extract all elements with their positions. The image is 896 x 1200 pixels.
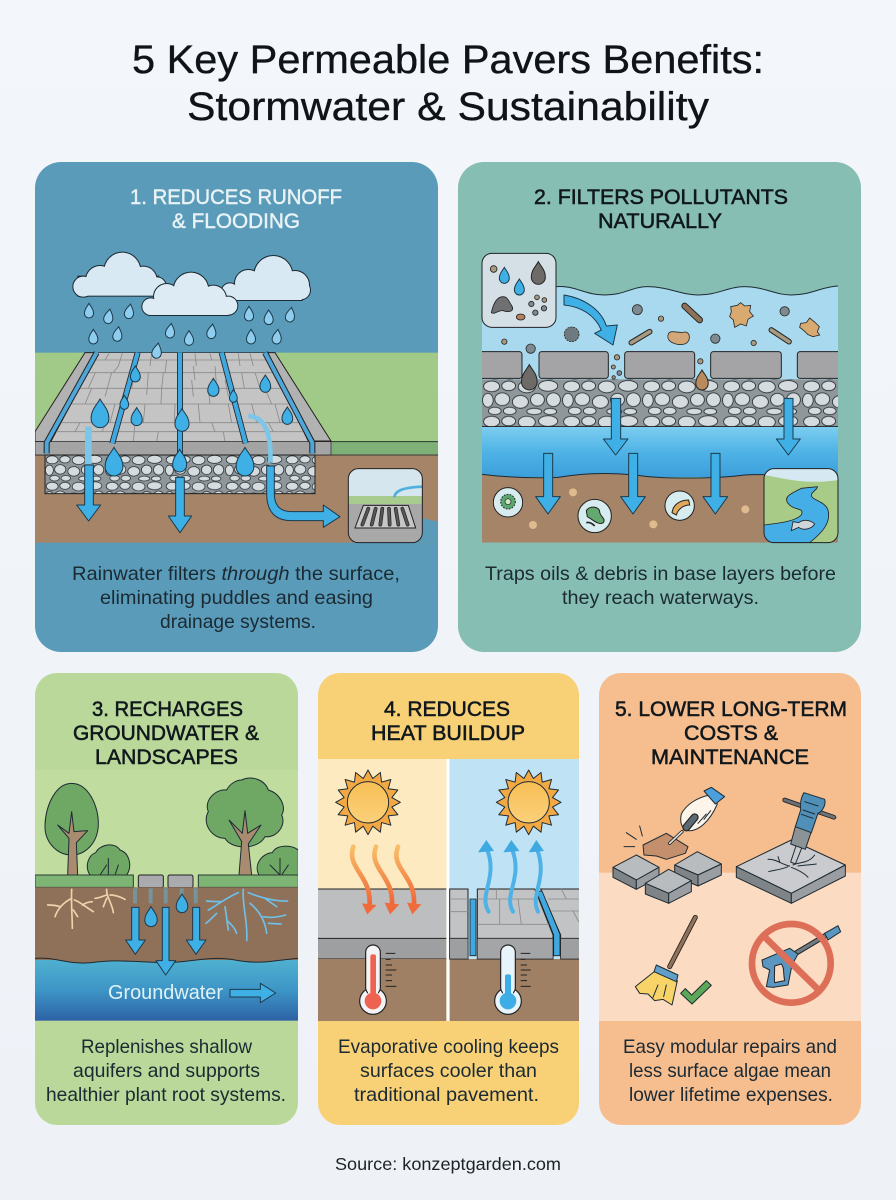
arrowheads: heat xyxy=(362,903,421,914)
label: groundwater: Groundwater xyxy=(108,981,223,1004)
bush left xyxy=(87,845,130,875)
icon: modular paver repair xyxy=(613,787,725,903)
panel: lower long-term costs and maintenance xyxy=(599,673,861,1125)
heading: recharges groundwater: LANDSCAPES xyxy=(95,745,238,769)
heading: reduces heat: HEAT BUILDUP xyxy=(371,721,525,745)
thermometer: cool xyxy=(495,945,531,1014)
title: Stormwater & Sustainability xyxy=(187,85,709,129)
body text: healthier plant root systems. xyxy=(46,1084,286,1106)
heading: lower costs: 5. LOWER LONG-TERM xyxy=(615,697,847,721)
icon: no pressure washer xyxy=(752,924,841,1003)
paver surface xyxy=(35,353,331,455)
heading: lower costs: MAINTENANCE xyxy=(651,745,809,769)
impermeable pavement xyxy=(318,889,446,1021)
ground strip and pavers xyxy=(35,875,298,888)
heading: reduces runoff: 1. REDUCES RUNOFF xyxy=(130,185,342,209)
heading: lower costs xyxy=(615,697,847,769)
heading: filters pollutants xyxy=(534,189,788,228)
panel: reduces heat buildup xyxy=(318,673,580,1125)
body text xyxy=(623,1036,837,1106)
heading: filters pollutants: NATURALLY xyxy=(598,209,722,233)
icon: jackhammer on slab xyxy=(736,793,845,903)
permeable pavement xyxy=(450,889,580,1021)
bush right xyxy=(257,846,298,875)
icon: storm drain inset xyxy=(348,469,422,543)
icon: pollutant inset xyxy=(482,253,556,327)
body text: Easy modular repairs and xyxy=(623,1036,837,1058)
body text: Evaporative cooling keeps xyxy=(338,1036,559,1058)
heading: reduces runoff xyxy=(131,189,342,228)
sun right xyxy=(496,770,561,835)
body text: drainage systems. xyxy=(160,611,316,633)
pollutant particles xyxy=(502,303,820,379)
body text xyxy=(338,1036,559,1106)
icon: microbes xyxy=(493,488,694,533)
illustration: hot vs cool pavement xyxy=(318,759,580,1021)
heading: recharges groundwater: 3. RECHARGES xyxy=(92,697,243,721)
tree left xyxy=(45,783,98,875)
source line: Source: konzeptgarden.com xyxy=(335,1154,561,1174)
sun left xyxy=(336,770,400,835)
heading: reduces heat: 4. REDUCES xyxy=(384,697,510,721)
arrows: water flow xyxy=(77,465,340,533)
body text: traditional pavement. xyxy=(354,1084,539,1106)
illustration: filtration layers xyxy=(475,253,844,543)
body text xyxy=(46,1036,286,1106)
icon: broom with check xyxy=(635,917,711,1005)
roots dry xyxy=(48,889,125,928)
body text xyxy=(485,563,836,609)
arrows: heat absorbed xyxy=(352,847,414,903)
title xyxy=(132,38,764,129)
panel: filters pollutants naturally xyxy=(458,162,861,652)
body text: surfaces cooler than xyxy=(360,1060,537,1082)
heading: recharges groundwater: GROUNDWATER & xyxy=(73,721,259,745)
heading: reduces heat xyxy=(372,701,524,740)
heading: recharges groundwater xyxy=(74,701,259,764)
body text xyxy=(72,563,400,633)
title: 5 Key Permeable Pavers Benefits: xyxy=(132,38,764,82)
arrow: groundwater flow xyxy=(230,983,276,1003)
icon: clean river inset xyxy=(764,469,838,543)
body text: Traps oils & debris in base layers before xyxy=(485,563,836,585)
gravel base xyxy=(45,455,315,494)
body text: aquifers and supports xyxy=(73,1060,260,1082)
tree right xyxy=(206,778,283,875)
pavers xyxy=(475,352,844,378)
heading: filters pollutants: 2. FILTERS POLLUTANTS xyxy=(534,185,788,209)
heading: reduces runoff: & FLOODING xyxy=(172,209,300,233)
body text: Replenishes shallow xyxy=(81,1036,253,1058)
cloud left xyxy=(73,253,166,297)
arrows: water flowing down xyxy=(536,295,800,514)
arrows: evaporating moisture xyxy=(478,840,544,912)
cloud right xyxy=(222,256,310,300)
body text: less surface algae mean xyxy=(629,1060,831,1082)
roots watered xyxy=(206,889,288,941)
thermometer: hot xyxy=(360,945,396,1014)
heading: lower costs: COSTS & xyxy=(684,721,778,745)
arrows: infiltration xyxy=(126,907,206,975)
gravel layer xyxy=(482,379,838,427)
body text: Rainwater filters through the surface, xyxy=(72,563,400,585)
body text: lower lifetime expenses. xyxy=(629,1084,833,1106)
cloud centre xyxy=(142,273,237,315)
panel: reduces runoff and flooding xyxy=(35,162,438,652)
body text: eliminating puddles and easing xyxy=(100,587,373,609)
body text: they reach waterways. xyxy=(562,587,759,609)
panel: recharges groundwater and landscapes xyxy=(35,673,298,1125)
illustration: maintenance icons xyxy=(599,787,861,1021)
illustration: trees, soil and aquifer xyxy=(35,770,298,1021)
illustration: pavement cross-section with rain xyxy=(35,253,438,543)
